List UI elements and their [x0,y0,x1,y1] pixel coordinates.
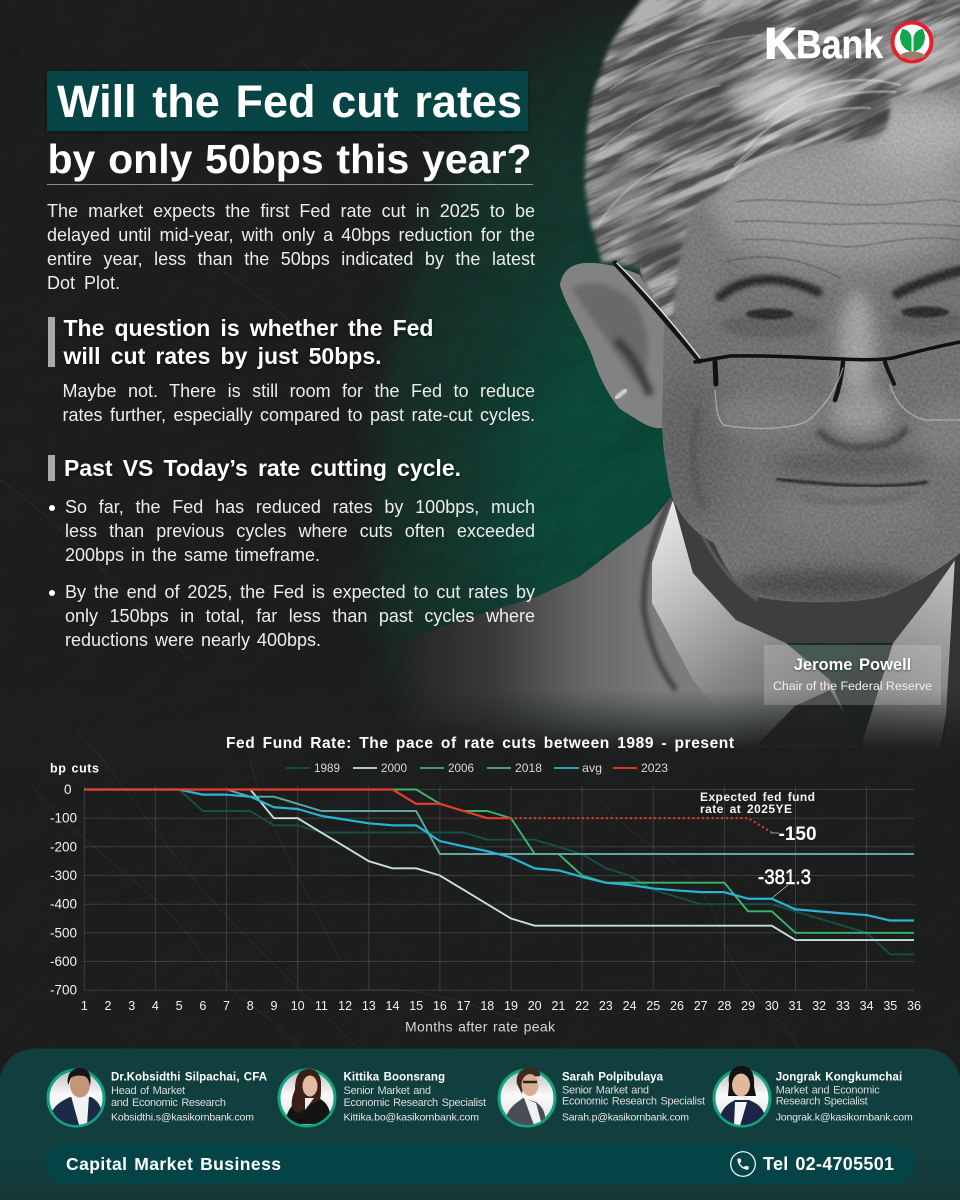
legend [286,761,668,775]
chart title: Fed Fund Rate: The pace of rate cuts between 1989 - present [226,735,734,752]
x axis labels: 16 [433,999,447,1013]
x axis labels: 15 [409,999,423,1013]
x axis labels: 8 [247,999,254,1013]
x axis labels: 6 [199,999,206,1013]
legend: 2000 [381,761,407,775]
caption: Jerome Powell [764,645,941,705]
heading: Past VS Today’s rate cutting cycle. [64,455,461,481]
photo [48,1068,104,1126]
bullet 1 [49,496,535,565]
portrait: Jerome Powell [408,0,960,744]
person: Sarah: Economic Research Specialist [562,1096,705,1108]
annotation: expected fed fund rate: -150 [778,824,816,845]
x axis labels: 32 [812,999,826,1013]
ear [560,263,664,428]
x axis labels: 19 [504,999,518,1013]
bullet 1: less than previous cycles where cuts often exceeded [65,521,535,541]
series 2006 [84,790,914,933]
intro paragraph: The market expects the first Fed rate cut in 2025 to be [47,200,535,220]
body text: Maybe not. There is still room for the Fed to reduce [62,380,535,400]
section bar [48,317,55,367]
annotation: average: -381.3 [758,866,811,889]
icon: phone [731,1152,755,1176]
intro paragraph [47,200,535,292]
x axis labels: 35 [883,999,897,1013]
bullet 2: By the end of 2025, the Fed is expected to cut rates by [65,582,535,602]
person: Kittika: Kittika.bo@kasikornbank.com [344,1112,479,1124]
photo [714,1066,770,1126]
divider under title [47,184,533,185]
x axis labels: 28 [717,999,731,1013]
person: Sarah: Senior Market and [562,1084,649,1096]
body text: rates further, especially compared to past rate-cut cycles. [62,404,535,424]
x axis labels: 23 [599,999,613,1013]
x axis labels: 12 [338,999,352,1013]
person: Jongrak [714,1066,913,1126]
intro paragraph: entire year, less than the 50bps indicated by the latest [47,249,535,269]
x axis labels: 11 [315,999,328,1013]
bullet 2: reductions were nearly 400bps. [65,630,321,650]
title line 2: by only 50bps this year? [48,136,532,182]
person: Kobsidthi: Kobsidthi.s@kasikornbank.com [111,1112,254,1124]
series 2023 projected [511,818,772,833]
x axis labels: 31 [789,999,802,1013]
legend: 2006 [448,761,474,775]
person: Kittika: Kittika Boonsrang [344,1072,445,1084]
brows [720,270,960,297]
x axis labels: 5 [176,999,183,1013]
x axis labels: 26 [670,999,684,1013]
mouth [776,479,928,486]
x axis title: Months after rate peak [405,1018,556,1034]
contact bar: Tel 02-4705501 [763,1154,894,1174]
heading: will cut rates by just 50bps. [64,343,382,369]
x axis labels: 2 [105,999,112,1013]
y axis labels: -100 [50,811,77,826]
heading [64,315,434,370]
person: Kobsidthi: and Economic Research [111,1097,226,1109]
section bar [48,455,55,481]
eyes [746,308,794,320]
glasses [615,263,960,428]
x axis labels: 4 [152,999,159,1013]
heading: The question is whether the Fed [64,315,434,341]
bullet 2 [49,582,535,650]
x axis labels: 7 [223,999,230,1013]
x axis labels: 9 [271,999,278,1013]
x axis labels: 36 [907,999,921,1013]
x axis labels: 1 [81,999,88,1013]
x axis labels: 27 [694,999,708,1013]
x axis labels: 30 [765,999,779,1013]
x axis labels: 17 [457,999,471,1013]
data lines [84,790,914,954]
series 2018 [84,790,914,854]
x axis labels: 25 [646,999,660,1013]
footer panel [0,1048,960,1200]
x axis labels: 13 [362,999,376,1013]
intro paragraph: Dot Plot. [47,272,120,292]
person: Kobsidthi: Head of Market [111,1085,185,1097]
annotation: expected fed fund rate: rate at 2025YE [700,802,792,816]
y axis labels: 0 [64,782,72,797]
shirt collar right [862,560,955,744]
forehead wrinkles [725,200,960,278]
contact bar [44,1145,916,1184]
shirt collar left [652,500,844,740]
bullet 1: So far, the Fed has reduced rates by 100bps, much [65,496,535,516]
legend: 2023 [641,761,668,775]
caption: Jerome Powell: Chair of the Federal Reserve [773,679,932,693]
person: Jongrak: Market and Economic [776,1084,880,1096]
section: the question [48,315,535,425]
suit [408,497,758,744]
logo: KBank: Bank [796,23,884,67]
y axis labels: -400 [50,897,77,912]
photo [279,1069,335,1126]
x axis labels: 10 [291,999,305,1013]
hair [582,0,960,320]
y axis labels: -200 [50,839,77,854]
person: Kobsidthi [48,1068,267,1126]
person: Sarah [499,1067,705,1126]
annotation: expected fed fund rate [700,790,816,845]
x axis labels: 14 [386,999,399,1013]
bullet 2: only 150bps in total, far less than past cycles where [65,606,535,626]
y axis labels: -300 [50,868,77,883]
legend: 2018 [515,761,542,775]
x axis labels: 22 [575,999,589,1013]
contact bar: Capital Market Business [66,1154,281,1174]
annotation: expected fed fund rate: Expected fed fund [700,790,815,804]
series 2023 [84,790,511,818]
x axis labels: 18 [480,999,494,1013]
title line 1 box: Will the Fed cut rates [57,76,522,127]
bullet 1: 200bps in the same timeframe. [65,545,320,565]
person: Jongrak: Research Specialist [776,1096,868,1108]
necktie [757,690,864,745]
nose [830,390,890,434]
x axis labels: 29 [741,999,755,1013]
series 2000 [84,790,914,940]
caption: Jerome Powell: Jerome Powell [794,656,911,674]
logo: KBank [765,20,934,68]
x axis labels: 3 [128,999,135,1013]
y axis labels [50,782,77,998]
annotation: average [758,866,811,898]
x axis labels: 24 [623,999,637,1013]
series avg [84,790,914,921]
icon: KBank seedling [892,22,932,62]
person: Sarah: Sarah.p@kasikornbank.com [562,1112,689,1124]
smile crease [693,410,705,510]
eye shadows [722,312,822,338]
series 1989 [84,790,914,954]
x axis labels: 33 [836,999,850,1013]
y axis labels: -500 [50,925,77,940]
neck [673,500,960,643]
person: Kittika: Senior Market and [344,1085,431,1097]
logo: KBank: K [765,20,795,68]
face [640,83,960,602]
grid [84,786,914,990]
title [47,71,532,182]
legend: 1989 [314,761,340,775]
person: Sarah: Sarah Polpibulaya [562,1072,664,1084]
x axis labels: 20 [528,999,542,1013]
y axis unit: bp cuts [50,762,99,776]
y axis labels: -600 [50,954,77,969]
section: past vs today [48,455,535,650]
x axis labels: 21 [551,999,565,1013]
person: Jongrak: Jongrak.k@kasikornbank.com [776,1112,913,1124]
person: Kobsidthi: Dr.Kobsidthi Silpachai, CFA [111,1072,267,1084]
upper lip shadow [770,453,930,475]
body text [62,380,535,425]
legend: avg [582,761,602,775]
y axis labels: -700 [50,983,77,998]
person: Kittika [279,1069,486,1126]
person: Jongrak: Jongrak Kongkumchai [776,1072,902,1084]
intro paragraph: delayed until mid-year, with only a 40bps reduction for the [47,225,535,245]
x axis labels [81,999,921,1013]
photo [499,1067,555,1126]
x axis labels: 34 [860,999,874,1013]
person: Kittika: Economic Research Specialist [344,1097,486,1109]
